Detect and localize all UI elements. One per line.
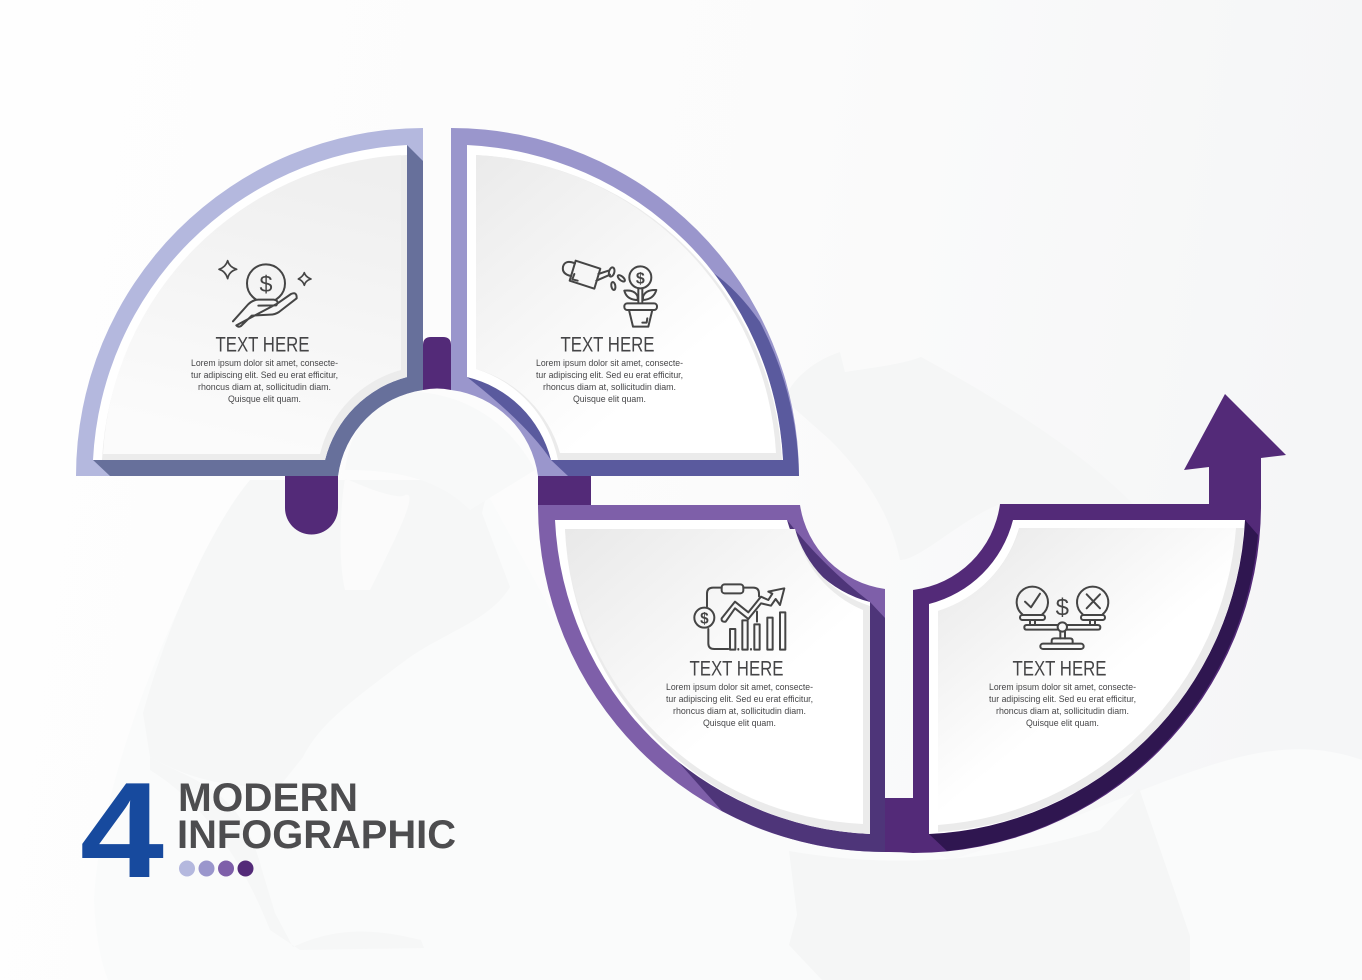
panel 2 heading: TEXT HERE [560,334,654,356]
icon: watering can and money plant [563,261,657,327]
panel 4 body text: Lorem ipsum dolor sit amet, consecte- [989,682,1136,693]
panel 4 body text: rhoncus diam at, sollicitudin diam. [996,706,1129,717]
panel 1 shaded band [93,145,423,476]
panel 4 card face [938,528,1236,825]
panel 1 body text: tur adipiscing elit. Sed eu erat efficitur, [191,370,338,381]
panel 2 ring [451,128,799,476]
panel 3 body text: Quisque elit quam. [703,718,776,729]
panel 4 with arrow [913,394,1286,853]
panel 4 body text [989,682,1136,729]
icon: balance scale with check and cross [1017,587,1108,649]
panel 2 shaded inner wedge [467,377,551,460]
panel 2 card [467,145,783,460]
panel 2 card edge [476,155,782,460]
panel 1 body text: rhoncus diam at, sollicitudin diam. [198,382,331,393]
panel 4 ring and arrow head [913,394,1286,853]
panel 1 card face [103,155,401,454]
world map backdrop [94,352,1362,980]
panel 1 card [93,145,407,460]
panel 3 body text: rhoncus diam at, sollicitudin diam. [673,706,806,717]
panel 3 heading: TEXT HERE [690,658,784,680]
panel 4 card [929,520,1245,834]
colour dots [179,860,254,876]
panel 1 heading: TEXT HERE [216,334,310,356]
panel 4 heading: TEXT HERE [1012,658,1106,680]
title line 2: INFOGRAPHIC [177,813,456,857]
icon: clipboard with growth chart: $ [700,611,709,628]
panel 3 card edge [565,529,870,834]
connector: drop below panel 1 [285,476,338,534]
panel 3 ring [538,505,885,852]
panel 4 body text: tur adipiscing elit. Sed eu erat efficitur, [989,694,1136,705]
icon: hand holding coin [219,261,311,327]
panel 3 body text: tur adipiscing elit. Sed eu erat efficitur, [666,694,813,705]
icon: clipboard with growth chart [694,584,785,650]
connector: between panels 2 and 3 [538,476,591,505]
panel 1 [76,128,423,476]
panel 3 card [555,520,870,834]
connector: centre top [423,337,451,390]
title line 1: MODERN [178,776,358,820]
panel 4 body text: Quisque elit quam. [1026,718,1099,729]
panel 4 shaded band [929,520,1258,851]
panel 2 body text: rhoncus diam at, sollicitudin diam. [543,382,676,393]
panel 4 card edge [938,528,1244,832]
panel 3 body text: Lorem ipsum dolor sit amet, consecte- [666,682,813,693]
icon: watering can and money plant: $ [636,270,645,287]
panel 2 shaded outer band [551,272,799,476]
panel 2 body text [536,358,683,405]
panel 3 shaded band [674,602,885,852]
icon: balance scale with check and cross: $ [1056,595,1069,622]
numeral 4: 4 [80,754,164,906]
panel 3 body text [666,682,813,729]
panel 3 card face [565,529,863,824]
title block [80,754,456,906]
panel 2 card face [476,155,776,453]
panel 1 body text: Quisque elit quam. [228,394,301,405]
panel 1 body text: Lorem ipsum dolor sit amet, consecte- [191,358,338,369]
panel 2 body text: Quisque elit quam. [573,394,646,405]
panel 2 body text: tur adipiscing elit. Sed eu erat efficitur, [536,370,683,381]
panel 1 card edge [102,155,407,460]
panel 3 shaded wedge [787,520,870,602]
panel 1 ring [76,128,423,476]
panel 3 [538,505,885,852]
connector: bottom between panels 3 and 4 [885,798,913,853]
panel 2 [451,128,799,476]
icon: hand holding coin: $ [260,271,273,297]
panel 2 body text: Lorem ipsum dolor sit amet, consecte- [536,358,683,369]
panel 1 body text [191,358,338,405]
